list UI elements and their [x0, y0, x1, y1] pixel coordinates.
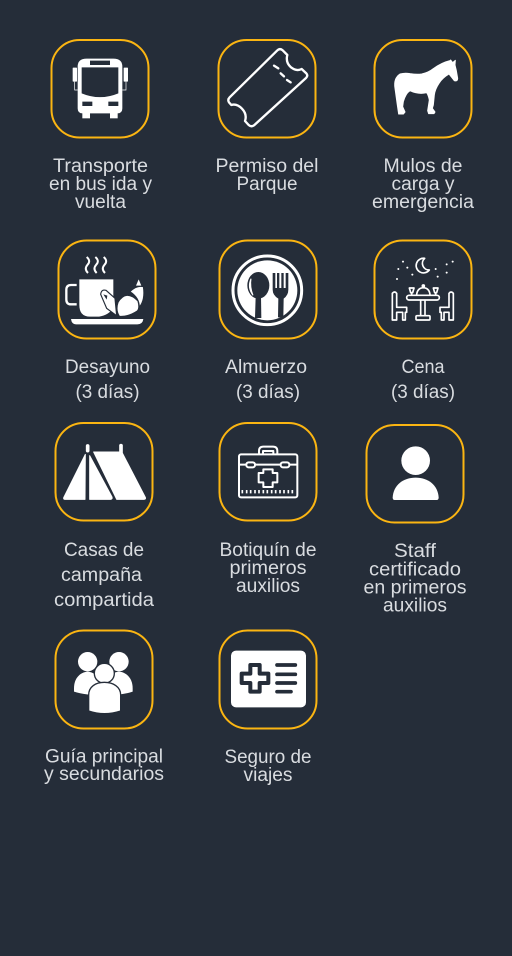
label: casas de campaña: Casas de — [64, 540, 144, 561]
item: first aid kit — [220, 423, 316, 597]
label: staff: certificado — [369, 560, 461, 580]
label: casas de campaña: compartida — [54, 590, 154, 611]
label: botiquín: auxilios — [236, 576, 300, 597]
label: transporte: en bus ida y — [49, 174, 152, 195]
label: mulos: Mulos de — [384, 156, 462, 177]
label: casas de campaña: campaña — [61, 565, 142, 586]
label: cena: (3 días) — [391, 382, 455, 403]
item: certified staff — [364, 425, 466, 616]
label: guías: Guía principal — [45, 746, 163, 768]
label: seguro: viajes — [244, 765, 292, 786]
label: staff: auxilios — [383, 596, 447, 616]
icon: first aid case — [239, 447, 297, 497]
label: botiquín: Botiquín de — [220, 540, 316, 561]
label: transporte: Transporte — [53, 156, 148, 177]
label: mulos: emergencia — [372, 192, 474, 213]
item: dinner — [374, 240, 472, 403]
item: park permit — [216, 40, 318, 195]
label: almuerzo: Almuerzo — [225, 357, 307, 378]
label: cena: Cena — [402, 357, 445, 378]
label: desayuno: Desayuno — [65, 357, 150, 378]
icon: person — [393, 446, 439, 500]
label: almuerzo: (3 días) — [236, 382, 300, 403]
label: permiso: Parque — [236, 174, 298, 195]
icon: ticket — [228, 49, 307, 126]
icon: insurance card — [231, 651, 306, 707]
label: staff: Staff — [394, 541, 437, 562]
item: breakfast — [58, 240, 156, 403]
item: tents — [54, 423, 154, 611]
icon: dinner table under the moon — [392, 258, 454, 320]
label: permiso: Permiso del — [216, 156, 318, 177]
label: guías: y secundarios — [44, 764, 164, 785]
label: seguro: Seguro de — [224, 747, 312, 768]
label: mulos: carga y — [392, 174, 455, 195]
item: mules — [372, 40, 474, 213]
icon: bus — [73, 59, 128, 118]
label: staff: en primeros — [364, 578, 466, 598]
icon: plate with spoon and fork — [233, 256, 302, 325]
label: transporte: vuelta — [75, 192, 126, 213]
icon: group of people — [74, 652, 133, 714]
label: desayuno: (3 días) — [76, 382, 140, 403]
item: lunch — [220, 240, 316, 403]
icon: coffee and croissant — [66, 257, 144, 324]
label: botiquín: primeros — [230, 558, 306, 579]
icon: mule — [395, 60, 458, 114]
item: travel insurance — [220, 630, 316, 786]
icon: tent — [64, 444, 145, 499]
item: bus transport — [49, 40, 152, 213]
item: guides — [44, 630, 164, 785]
